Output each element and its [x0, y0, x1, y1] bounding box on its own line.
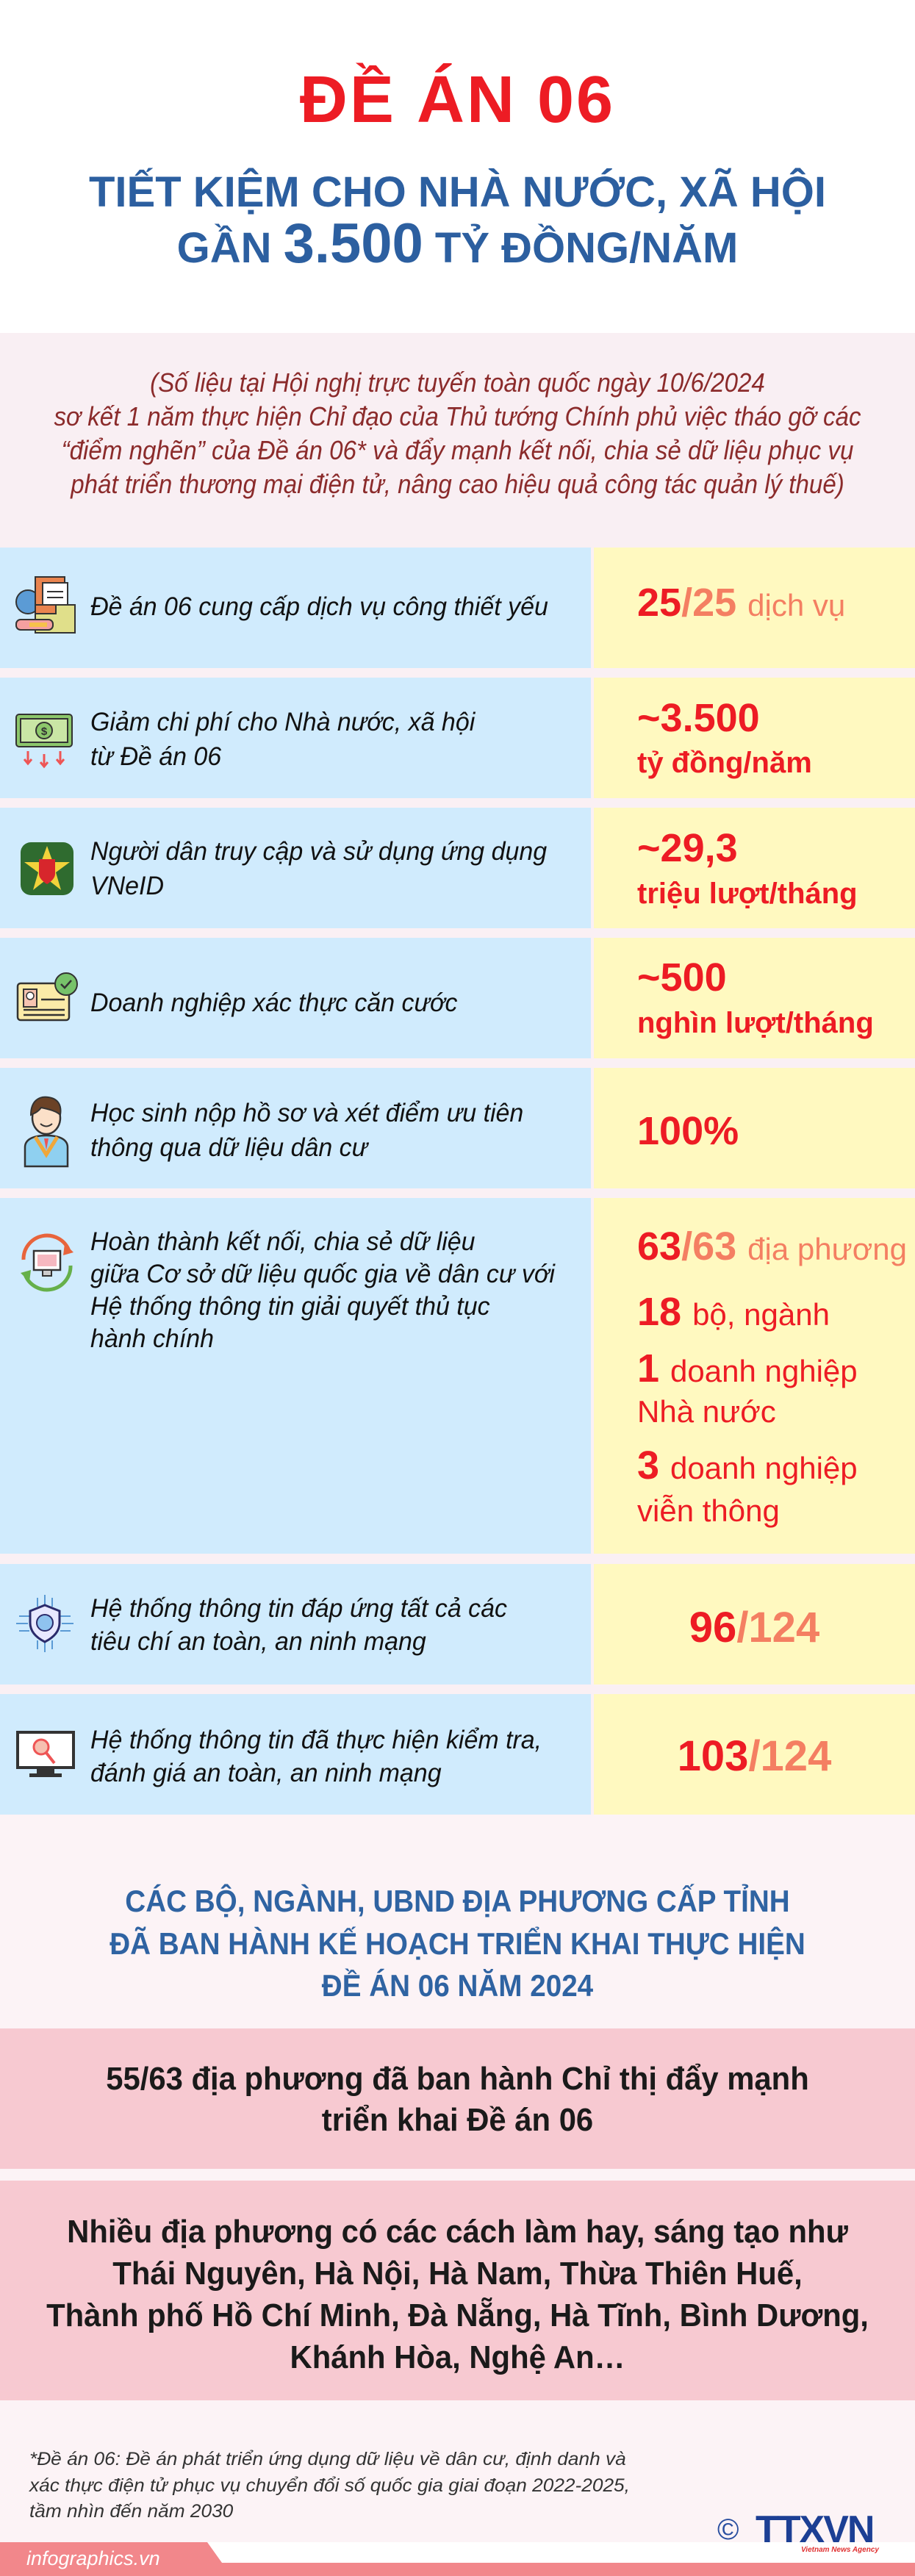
icon: shield circuit	[16, 1595, 73, 1652]
panel: row 3 VNeID: triệu lượt/tháng	[637, 878, 858, 910]
text: row 2	[90, 708, 476, 771]
icon: folder gear pencil	[15, 576, 76, 634]
text: row 6: giữa Cơ sở dữ liệu quốc gia về dân cư với	[90, 1260, 555, 1288]
panel: row 4 business	[0, 938, 915, 1058]
text: row 4: Doanh nghiệp xác thực căn cước	[90, 989, 458, 1017]
icon: VNeID	[21, 842, 73, 895]
panel: row 6 data connection: 3 doanh nghiệp	[637, 1443, 858, 1488]
value: 25/25: 25/25 dịch vụ	[637, 581, 845, 625]
title: ĐỀ ÁN 06	[300, 63, 615, 137]
values: row 6: 63/63 địa phương	[637, 1224, 907, 1269]
value: 96/124: 96/124	[689, 1604, 819, 1651]
panel: row 1 services	[0, 548, 915, 668]
panel: row 2 cost: tỷ đồng/năm	[637, 747, 812, 779]
panel: row 4 business: nghìn lượt/tháng	[637, 1007, 874, 1039]
text: row 8: đánh giá an toàn, an ninh mạng	[90, 1759, 442, 1787]
box: creative localities: Thành phố Hồ Chí Minh, Đà Nẵng, Hà Tĩnh, Bình Dương,	[46, 2297, 869, 2333]
heading: plans: ĐÃ BAN HÀNH KẾ HOẠCH TRIỂN KHAI THỰC HIỆN	[110, 1926, 805, 1961]
text: row 2: từ Đề án 06	[90, 742, 221, 771]
panel: row 6 data connection: 18 bộ, ngành	[637, 1290, 830, 1334]
panel: row 6 data connection: 1 doanh nghiệp	[637, 1346, 858, 1391]
footnote: xác thực điện tử phục vụ chuyển đổi số quốc gia giai đoạn 2022-2025,	[29, 2475, 630, 2496]
footer bar	[0, 2542, 915, 2576]
text: row 5: thông qua dữ liệu dân cư	[90, 1133, 367, 1162]
icon: ID card	[16, 972, 78, 1022]
icon: sync monitor	[21, 1233, 73, 1292]
text: row 3: VNeID	[90, 872, 164, 900]
text: row 5: Học sinh nộp hồ sơ và xét điểm ưu tiên	[90, 1099, 523, 1127]
intro text: (Số liệu tại Hội nghị trực tuyến toàn quốc ngày 10/6/2024	[150, 367, 765, 398]
text: row 7	[90, 1594, 507, 1656]
text: row 7: Hệ thống thông tin đáp ứng tất cả các	[90, 1594, 507, 1623]
logo: TTXVN: Vietnam News Agency	[801, 2546, 879, 2554]
box: creative localities: Thái Nguyên, Hà Nội, Hà Nam, Thừa Thiên Huế,	[112, 2256, 803, 2292]
panel: row 6 data connection: Nhà nước	[637, 1394, 776, 1429]
panel: row 5 students	[0, 1068, 915, 1188]
intro text: sơ kết 1 năm thực hiện Chỉ đạo của Thủ tướng Chính phủ việc tháo gỡ các	[54, 401, 861, 431]
background separators	[0, 548, 915, 1815]
panel: intro note	[0, 333, 915, 548]
panel: row 7 security criteria	[0, 1564, 915, 1685]
panel: row 6 data connection: viễn thông	[637, 1493, 780, 1528]
subtitle: GẦN 3.500 TỶ ĐỒNG/NĂM	[177, 212, 738, 275]
icon: monitor magnifier	[16, 1731, 75, 1777]
text: row 6: hành chính	[90, 1324, 214, 1353]
box: 55/63 directive: triển khai Đề án 06	[322, 2102, 593, 2138]
value: 29,3: ~29,3	[637, 826, 738, 870]
source: infographics.vn: infographics.vn	[26, 2547, 160, 2569]
logo: TTXVN: ©	[717, 2514, 739, 2546]
value: 103/124: 103/124	[678, 1732, 831, 1780]
text: row 7: tiêu chí an toàn, an ninh mạng	[90, 1627, 426, 1656]
panel: row 3 VNeID	[0, 808, 915, 928]
footnote: tầm nhìn đến năm 2030	[29, 2501, 233, 2522]
panel: row 8 security audit	[0, 1694, 915, 1815]
icon: money bill	[15, 714, 73, 769]
text: row 3	[90, 837, 547, 900]
text: row 2: Giảm chi phí cho Nhà nước, xã hội	[90, 708, 475, 736]
value: 500: ~500	[637, 955, 727, 1000]
icon: money bill: $	[41, 725, 48, 738]
text: row 6	[90, 1227, 556, 1353]
box: 55/63 directive	[0, 2028, 915, 2169]
heading: plans: ĐỀ ÁN 06 NĂM 2024	[322, 1968, 593, 2003]
box: 55/63 directive: 55/63 địa phương đã ban hành Chỉ thị đẩy mạnh	[106, 2061, 809, 2097]
panel: row 6 data connection	[0, 1198, 915, 1554]
text: row 8: Hệ thống thông tin đã thực hiện kiểm tra,	[90, 1726, 542, 1754]
panel: row 2 cost	[0, 678, 915, 798]
text: row 6: Hoàn thành kết nối, chia sẻ dữ liệu	[90, 1227, 476, 1256]
value: 3.500: ~3.500	[637, 696, 760, 740]
text: row 5	[90, 1099, 523, 1162]
logo: TTXVN: TTXVN	[756, 2508, 873, 2551]
icon: student	[24, 1097, 69, 1167]
subtitle	[89, 168, 826, 275]
box: creative localities: Khánh Hòa, Nghệ An…	[290, 2339, 625, 2375]
logo: TTXVN	[717, 2508, 879, 2554]
intro text: phát triển thương mại điện tử, nâng cao hiệu quả công tác quản lý thuế)	[71, 469, 844, 499]
intro text: “điểm nghẽn” của Đề án 06* và đẩy mạnh kết nối, chia sẻ dữ liệu phục vụ	[62, 435, 853, 465]
intro text	[54, 367, 861, 499]
box: creative localities: Nhiều địa phương có các cách làm hay, sáng tạo như	[67, 2214, 848, 2250]
heading: plans: CÁC BỘ, NGÀNH, UBND ĐỊA PHƯƠNG CẤP TỈNH	[125, 1884, 790, 1918]
box: creative localities	[0, 2181, 915, 2400]
subtitle: TIẾT KIỆM CHO NHÀ NƯỚC, XÃ HỘI	[89, 168, 826, 216]
text: row 8	[90, 1726, 542, 1787]
value: 100%: 100%	[637, 1109, 739, 1153]
text: row 1: Đề án 06 cung cấp dịch vụ công thiết yếu	[90, 592, 548, 621]
heading: plans	[110, 1884, 805, 2003]
panel: bottom section	[0, 1815, 915, 2542]
footnote	[29, 2449, 630, 2522]
footnote: *Đề án 06: Đề án phát triển ứng dụng dữ liệu về dân cư, định danh và	[29, 2449, 626, 2469]
text: row 3: Người dân truy cập và sử dụng ứng dụng	[90, 837, 547, 866]
text: row 6: Hệ thống thông tin giải quyết thủ tục	[90, 1292, 490, 1321]
